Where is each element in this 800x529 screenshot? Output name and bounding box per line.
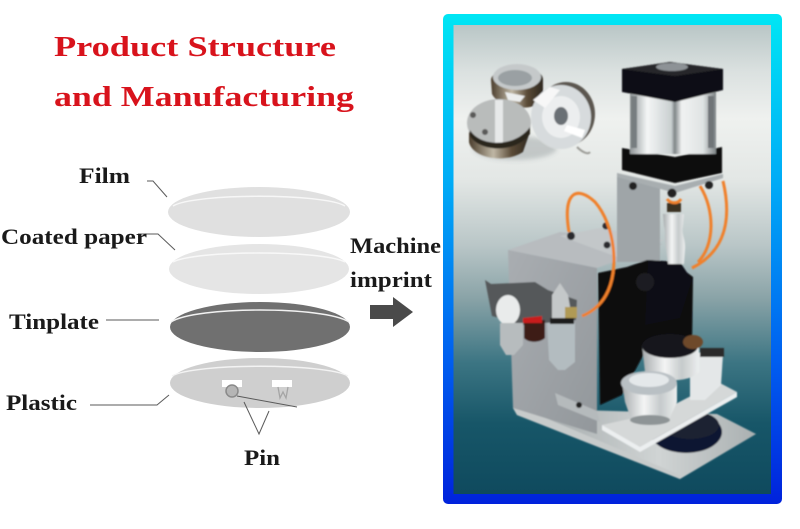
disc: coated paper: [169, 244, 349, 294]
label: machine imprint: [350, 233, 441, 292]
slide rail: [555, 393, 600, 422]
air regulator: [485, 280, 577, 370]
panel background: [454, 25, 771, 494]
machine: [485, 62, 756, 479]
cylinder tube: [630, 90, 716, 154]
machine body: [508, 222, 664, 434]
back dies: [642, 334, 724, 400]
die set: [467, 64, 595, 160]
label: plastic: Plastic: [6, 390, 77, 415]
panel: machine photo: [443, 14, 782, 504]
label: machine imprint: Machine: [350, 233, 441, 258]
leader lines: [90, 181, 297, 434]
front die: [621, 371, 677, 425]
disc: film: [168, 187, 350, 237]
pressure rod: [663, 214, 685, 264]
label: machine imprint: imprint: [350, 267, 433, 292]
panel frame: [443, 14, 782, 504]
arrow: [370, 297, 413, 327]
black oval mount: [650, 411, 722, 453]
label: pin: Pin: [244, 445, 280, 470]
base plate: [513, 408, 756, 479]
disc: tinplate: [170, 302, 350, 352]
slide tray: [602, 382, 737, 447]
label: film: Film: [79, 163, 130, 188]
cylinder lower cap: [622, 147, 722, 183]
cylinder top cap: [622, 62, 723, 102]
title: Product Structure: [54, 32, 336, 63]
title: [54, 32, 354, 113]
label: tinplate: Tinplate: [9, 309, 99, 334]
back die: [491, 64, 543, 108]
layer diagram: [1, 163, 350, 470]
left die: [467, 99, 531, 158]
orange air hoses: [567, 181, 727, 316]
title: and Manufacturing: [54, 82, 354, 113]
mount plate: [617, 173, 723, 193]
bracket: [617, 173, 660, 262]
black head: [598, 260, 693, 405]
label: coated paper: Coated paper: [1, 224, 147, 249]
disc: plastic: [170, 358, 350, 408]
right die: [531, 82, 595, 153]
